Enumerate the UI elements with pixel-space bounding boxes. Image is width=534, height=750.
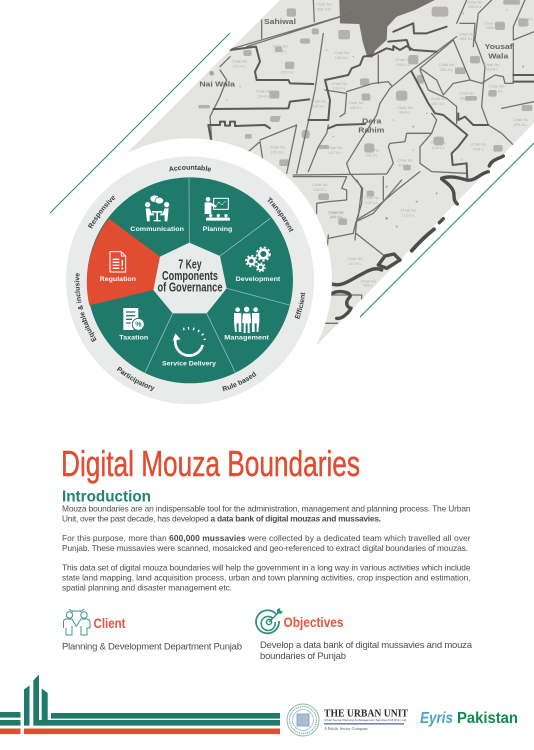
ring labels: Equitable & inclusive bbox=[74, 273, 96, 342]
map parcel labels: 097-9-L bbox=[431, 101, 446, 106]
map detail: lower area: 117-9-L bbox=[348, 261, 362, 266]
map parcel labels: 106-9-L bbox=[365, 153, 379, 158]
map parcel labels: Chak No bbox=[484, 62, 500, 67]
map parcel labels: Chak No bbox=[459, 90, 475, 95]
icon: planning bbox=[205, 197, 230, 221]
map parcel labels bbox=[232, 0, 533, 219]
map village labels: Yousaf bbox=[485, 42, 513, 51]
segment dividers bbox=[145, 178, 291, 373]
map parcel labels: 98-9-L bbox=[399, 110, 412, 115]
segment labels: Service Delivery bbox=[162, 360, 217, 367]
text block: introduction body: Mouza boundaries are an indispensable tool for the administration, management and planning process. The Urban bbox=[62, 504, 471, 514]
segment labels: Development bbox=[236, 276, 281, 283]
map parcel labels: 095-9-L bbox=[440, 67, 454, 72]
teal disc bbox=[87, 177, 293, 383]
map parcel labels: Chak No bbox=[364, 148, 380, 153]
map river bbox=[332, 156, 503, 318]
city bbox=[339, 0, 435, 57]
logo: eyris pakistan bbox=[420, 710, 518, 727]
centre title: Components bbox=[162, 268, 218, 283]
map parcel labels: 092-9-L bbox=[460, 95, 474, 100]
map detail: upper area bbox=[198, 0, 534, 240]
logo: the urban unit wordmark: Urban Sector Planning & Management Services Unit (Pvt.) Ltd. bbox=[324, 718, 407, 722]
map parcel labels: 107-9-L bbox=[328, 150, 343, 155]
segment labels: Taxation bbox=[119, 335, 148, 342]
logo: the urban unit wordmark: THE URBAN UNIT bbox=[324, 708, 408, 720]
map village labels bbox=[199, 17, 513, 135]
map parcel labels: 060-9-L bbox=[468, 4, 483, 9]
map parcel labels: 109-9-L bbox=[398, 162, 413, 167]
centre title bbox=[157, 256, 222, 295]
white halo bbox=[48, 138, 332, 422]
speckles bbox=[209, 9, 524, 228]
ring labels bbox=[74, 165, 306, 392]
ring labels: Participatory bbox=[116, 366, 155, 391]
text block: introduction body: spatial planning and disaster management etc. bbox=[62, 582, 232, 592]
map village labels: Nai Wala bbox=[199, 80, 236, 89]
decorative teal line: right bbox=[360, 143, 534, 317]
logo: eyris pakistan: Pakistan bbox=[457, 710, 518, 727]
map parcel labels: 112-9-L bbox=[402, 213, 416, 218]
segment: regulation highlight bbox=[87, 219, 160, 305]
map parcel labels: 094-9-L bbox=[460, 36, 474, 41]
map parcel labels: 135-9-L bbox=[273, 48, 288, 53]
logo: the urban unit wordmark: A Public Sector Company bbox=[324, 727, 368, 731]
icon: objectives bbox=[256, 608, 283, 633]
heading: introduction: Introduction bbox=[62, 488, 151, 506]
map parcel labels: Chak No bbox=[272, 44, 289, 49]
decorative teal line: left bbox=[50, 33, 230, 213]
map parcel labels: 108-9-L bbox=[349, 105, 364, 110]
map parcel labels: 055-9-R bbox=[317, 6, 331, 11]
footer skyline graphic bbox=[0, 674, 280, 734]
map parcel labels: Chak No bbox=[431, 96, 447, 101]
segment labels: Planning bbox=[203, 226, 232, 233]
map parcel labels: Chak No bbox=[431, 140, 447, 145]
map detail: lower area: 115-9-L bbox=[329, 215, 343, 220]
map parcel labels: 134-9-L bbox=[256, 94, 271, 99]
settlement patches bbox=[198, 0, 532, 225]
thick boundaries bbox=[208, 23, 534, 180]
map parcel labels: 113-9-L bbox=[365, 200, 379, 205]
map parcel labels: 132-9-L bbox=[232, 63, 247, 68]
map parcel labels: Chak No bbox=[401, 208, 417, 213]
map parcel labels: 081-L bbox=[520, 22, 531, 27]
map parcel labels: Chak No bbox=[517, 17, 533, 22]
logo: the urban unit wordmark bbox=[324, 708, 408, 731]
segment labels: Regulation bbox=[100, 276, 136, 283]
map parcel labels: Chak No bbox=[311, 99, 327, 104]
map parcel labels: 083-L bbox=[487, 25, 498, 30]
logo: urban unit seal bbox=[287, 704, 319, 736]
icon: taxation document bbox=[123, 308, 144, 330]
ring labels: Efficient bbox=[294, 292, 306, 319]
grey ring bbox=[66, 156, 314, 404]
ring labels: Rule based bbox=[222, 371, 256, 392]
map parcel labels: 133-9-L bbox=[280, 70, 295, 75]
text block: introduction body: For this purpose, more than 600,000 mussavies were collected by a dedicated team which travelled all over bbox=[62, 533, 471, 543]
map parcel labels: Chak No bbox=[439, 62, 455, 67]
segment labels bbox=[100, 226, 281, 367]
text: objectives detail bbox=[260, 640, 473, 662]
icon: service delivery cycle bbox=[173, 327, 206, 356]
text block: introduction body: Punjab. These mussavies were scanned, mosaicked and geo-referenced to extract digital boundaries of mouzas. bbox=[62, 543, 468, 553]
icon: client bbox=[64, 609, 90, 635]
map background bbox=[100, 0, 534, 350]
map parcel labels: Chak No bbox=[316, 2, 333, 7]
map detail: lower area bbox=[325, 180, 402, 323]
map parcel labels: Chak No bbox=[396, 57, 412, 62]
text block: introduction body bbox=[62, 504, 471, 592]
map parcel labels: Chak No bbox=[397, 158, 414, 163]
map detail: lower area: Chak No bbox=[328, 210, 344, 215]
map detail: lower area: Chak No bbox=[347, 256, 364, 261]
map village labels: Sahiwal bbox=[264, 17, 296, 26]
text: client name: Planning & Development Department Punjab bbox=[62, 642, 242, 652]
ring labels: Transparent bbox=[268, 196, 294, 232]
map parcel labels: Chak No bbox=[232, 58, 248, 63]
map parcel labels: Chak No bbox=[397, 105, 414, 110]
segment labels: Communication bbox=[130, 226, 184, 233]
map parcel labels: 115-9-L bbox=[330, 214, 344, 219]
logo: eyris pakistan: Eyris bbox=[420, 710, 453, 727]
title: Digital Mouza Boundaries bbox=[61, 443, 360, 484]
map parcel labels: 099-9-L bbox=[396, 62, 411, 67]
map village labels: Wala bbox=[488, 51, 509, 60]
map parcel labels: 116-9-L bbox=[313, 187, 327, 192]
map parcel labels: Chak No bbox=[327, 145, 344, 150]
map parcel labels: Chak No bbox=[312, 182, 329, 187]
map detail: lower area: Chak No bbox=[361, 278, 377, 283]
map parcel labels: Chak No bbox=[459, 32, 475, 37]
icon: development gears bbox=[246, 247, 270, 272]
map parcel labels: 070-5-L bbox=[514, 122, 528, 127]
text block: introduction body: state land mapping, land acquisition process, urban and town planning activities, crop inspection and estimation, bbox=[62, 572, 470, 582]
map parcel labels: 100-9-L bbox=[311, 104, 326, 109]
icon: communication bbox=[145, 195, 169, 221]
heading: objectives: Objectives bbox=[284, 615, 344, 630]
icon: taxation document: % bbox=[135, 322, 142, 329]
centre title: 7 Key bbox=[178, 256, 202, 271]
map detail: lower area: 069-L bbox=[363, 283, 374, 288]
map parcel labels: 101-9-L bbox=[332, 85, 347, 90]
thin roads bbox=[210, 0, 534, 240]
text block: introduction body: This data set of digital mouza boundaries will help the government in a long way in various activities which include bbox=[62, 562, 471, 572]
icon: regulation document bbox=[110, 252, 126, 272]
map parcel labels: 118-9-L bbox=[432, 145, 446, 150]
heading: client: Client bbox=[94, 616, 126, 631]
map village labels: Rahim bbox=[358, 126, 385, 135]
map parcel labels: 100-9-L bbox=[270, 149, 285, 154]
map parcel labels: Chak No bbox=[270, 144, 286, 149]
map parcel labels: Chak No bbox=[513, 117, 529, 122]
ring labels: Accountable bbox=[169, 165, 211, 172]
centre title: of Governance bbox=[157, 280, 222, 295]
centre heptagon bbox=[153, 243, 227, 313]
governance wheel bbox=[66, 138, 332, 404]
map parcel labels: 090-9-L bbox=[490, 89, 504, 94]
map parcel labels: Chak No bbox=[332, 81, 348, 86]
map parcel labels: Chak No bbox=[489, 84, 505, 89]
map parcel labels: 0/15-L bbox=[473, 147, 485, 152]
segment labels: Management bbox=[224, 335, 270, 342]
text: objectives detail: Develop a data bank of digital mussavies and mouza bbox=[260, 640, 473, 651]
map parcel labels: Chak No bbox=[484, 20, 500, 25]
map parcel labels: 093-9-L bbox=[485, 66, 499, 71]
ring labels: Responsive bbox=[88, 196, 116, 229]
map parcel labels: Chak No bbox=[334, 50, 350, 55]
map parcel labels: Chak No bbox=[364, 195, 380, 200]
map village labels: Dera bbox=[362, 116, 382, 125]
map parcel labels: Chak No bbox=[471, 142, 487, 147]
map parcel labels: Chak No bbox=[348, 100, 365, 105]
text block: introduction body: Unit, over the past decade, has developed a data bank of digital mouzas and mussavies. bbox=[62, 514, 381, 524]
icon: management people bbox=[234, 307, 259, 333]
map parcel labels: Chak No bbox=[329, 209, 345, 214]
map parcel labels: Chak No bbox=[256, 89, 272, 94]
text: objectives detail: boundaries of Punjab bbox=[260, 651, 346, 662]
map parcel labels: 135-9-L bbox=[335, 55, 349, 60]
